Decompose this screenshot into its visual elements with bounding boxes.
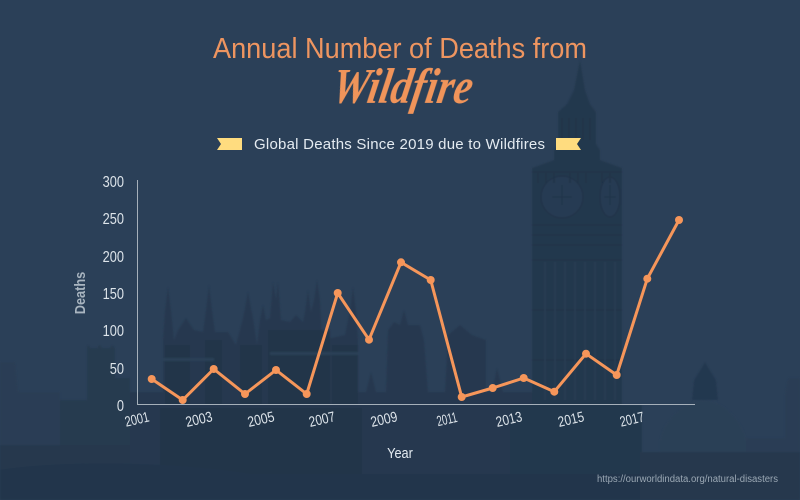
y axis tick labels: 250 (103, 211, 124, 228)
y axis tick labels: 200 (103, 249, 124, 266)
x axis year labels: 2007 (307, 408, 337, 430)
y axis tick labels: 100 (103, 323, 124, 340)
icon: left ribbon (217, 138, 242, 150)
y axis title: Deaths (71, 272, 88, 314)
x axis year labels: 2011 (435, 409, 459, 430)
left tower and far buildings (0, 362, 60, 500)
Houses of Parliament (130, 280, 540, 500)
line chart (71, 174, 695, 461)
y axis tick labels (103, 174, 124, 415)
x axis year labels: 2005 (246, 408, 276, 430)
x axis year labels: 2001 (123, 408, 151, 430)
axes (138, 180, 695, 404)
heading line: Annual Number of Deaths from (213, 33, 587, 65)
subtitle with ribbons (217, 136, 581, 153)
dome on the right (692, 362, 718, 400)
script word: Wildfire: Wildfire (328, 58, 478, 114)
title (213, 33, 587, 114)
x axis year labels: 2017 (618, 408, 646, 430)
x axis year labels: 2015 (556, 408, 586, 430)
x axis year labels (123, 408, 646, 430)
waterfront foreground (0, 445, 800, 500)
data points (148, 216, 683, 404)
x axis year labels: 2003 (184, 408, 214, 430)
x axis year labels: 2013 (494, 408, 524, 430)
y axis tick labels: 50 (110, 361, 124, 378)
clock tower: Big Ben (510, 60, 642, 500)
icon: right ribbon (556, 138, 581, 150)
data line (152, 220, 679, 400)
subtitle text: Global Deaths Since 2019 due to Wildfires (254, 136, 545, 153)
y axis tick labels: 300 (103, 174, 124, 191)
source link text: https://ourworldindata.org/natural-disasters (597, 474, 778, 485)
y axis tick labels: 150 (103, 286, 124, 303)
x axis year labels: 2009 (369, 408, 399, 430)
x axis title: Year (387, 444, 413, 461)
y axis tick labels: 0 (117, 398, 124, 415)
